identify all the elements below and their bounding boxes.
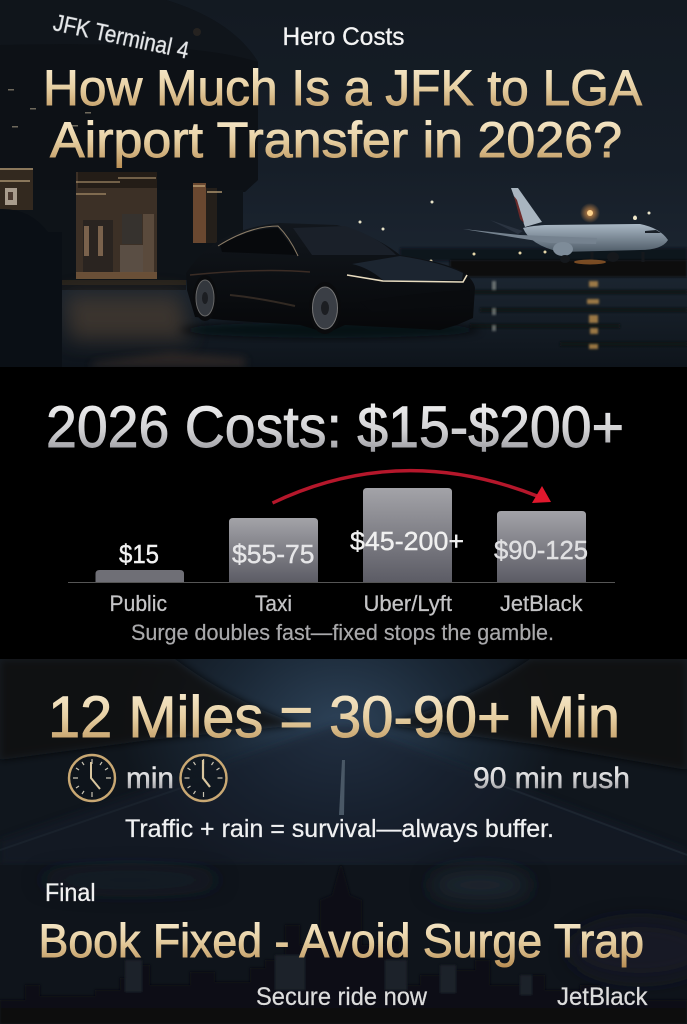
runway lights and reflection <box>492 203 637 349</box>
icon: black sedan <box>180 223 480 338</box>
label: Hero Costs: Hero Costs <box>282 23 404 51</box>
value labels <box>119 526 588 569</box>
heading: book fixed: Book Fixed - Avoid Surge Trap <box>38 914 644 967</box>
horizon band <box>358 200 687 344</box>
caption: traffic: Traffic + rain = survival—always buffer. <box>125 815 554 843</box>
panel: hero <box>0 0 687 367</box>
value labels: $15 <box>119 539 159 569</box>
car headlight <box>347 275 467 282</box>
label: 90 min rush: 90 min rush <box>473 762 630 795</box>
category labels <box>110 591 583 616</box>
right lit window <box>193 183 222 243</box>
foreground bin silhouette <box>0 209 62 367</box>
panel: travel time <box>0 659 687 865</box>
arrow: surge curve <box>272 471 551 503</box>
category labels: Uber/Lyft <box>364 591 452 616</box>
bar: Uber/Lyft <box>363 488 452 582</box>
left lit window <box>0 168 33 210</box>
tree lines <box>0 659 687 770</box>
wet tarmac ground <box>0 276 687 367</box>
label: Final: Final <box>45 879 96 907</box>
warm wet pavement reflection <box>65 295 245 367</box>
terminal building <box>0 0 258 290</box>
car wheels <box>193 275 341 334</box>
lit terminal entrance <box>76 172 157 279</box>
label: JFK Terminal 4: JFK Terminal 4 <box>51 9 191 65</box>
value labels: $90-125 <box>494 535 588 565</box>
title <box>43 60 643 168</box>
label: min: min <box>126 762 174 795</box>
label: JetBlack: JetBlack <box>557 983 648 1011</box>
storm clouds <box>40 870 687 980</box>
value labels: $55-75 <box>232 539 314 569</box>
title: How Much Is a JFK to LGA <box>43 60 643 116</box>
car windows <box>218 226 396 256</box>
heading: 2026 costs: 2026 Costs: $15-$200+ <box>46 395 624 460</box>
value labels: $45-200+ <box>350 526 464 556</box>
heading: 12 miles: 12 Miles = 30-90+ Min <box>48 685 620 750</box>
bar: Public <box>96 570 184 582</box>
icon: clock right <box>180 755 226 801</box>
city skyline <box>0 866 687 1024</box>
icon: clock left <box>69 755 115 801</box>
road surface <box>0 725 687 865</box>
category labels: Public <box>110 591 167 616</box>
bar chart <box>68 471 615 616</box>
category labels: JetBlack <box>500 591 583 616</box>
panel: final call to action <box>0 865 687 1024</box>
bar: Taxi <box>229 518 318 582</box>
caption: surge: Surge doubles fast—fixed stops the gamble. <box>131 620 554 645</box>
category labels: Taxi <box>255 591 292 616</box>
panel: costs <box>0 367 687 659</box>
ceiling spot lights <box>8 28 201 128</box>
label: Secure ride now: Secure ride now <box>256 983 428 1011</box>
title: Airport Transfer in 2026? <box>50 112 622 168</box>
icon: airplane <box>463 188 668 263</box>
bar: JetBlack <box>497 511 586 582</box>
